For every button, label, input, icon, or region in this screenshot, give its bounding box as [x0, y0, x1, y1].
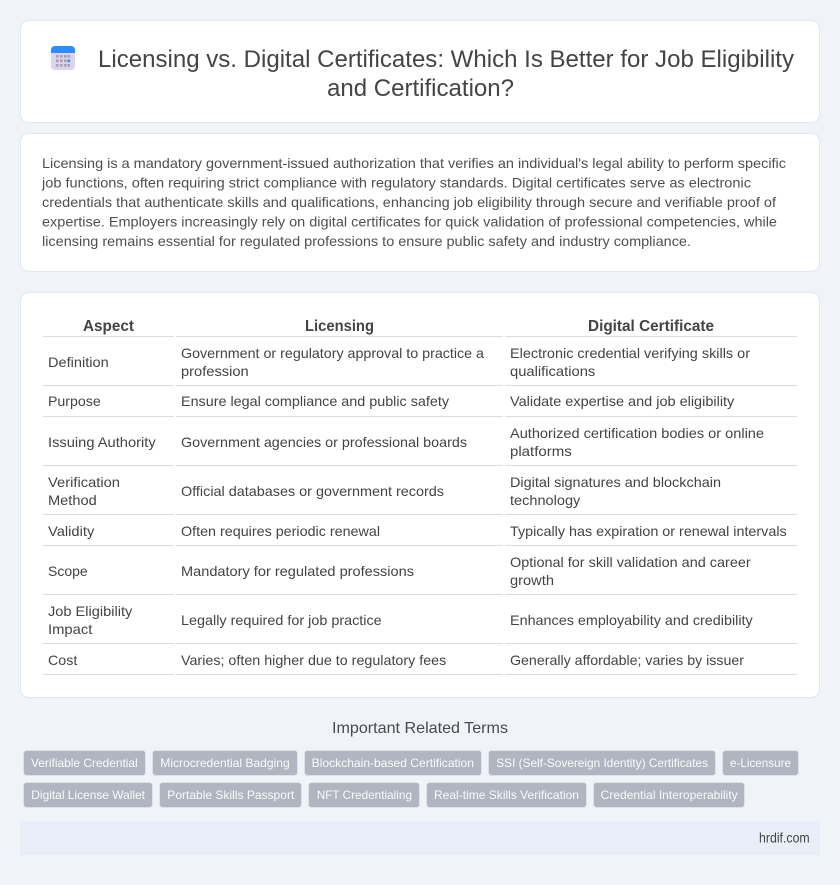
row: verification method: Official databases or government records — [181, 483, 444, 499]
heading: related terms: Important Related Terms — [332, 720, 508, 737]
row: definition — [43, 345, 797, 386]
panel: related term tags: Blockchain-based Certification — [312, 756, 474, 770]
row: validity: Typically has expiration or renewal intervals — [510, 523, 787, 539]
row: verification method: Digital signatures and blockchain — [510, 474, 721, 490]
row: job eligibility impact: Impact — [48, 621, 92, 637]
footer: hrdif.com — [759, 830, 810, 846]
panel: intro text: credentials that authenticate skills and qualifications, enhancing job eligibility through secure and verifiable proof of — [42, 194, 776, 210]
table header: Digital Certificate — [588, 318, 714, 335]
row: scope — [43, 554, 797, 595]
panel: intro text — [20, 134, 820, 272]
row: job eligibility impact: Job Eligibility — [48, 603, 132, 619]
title — [98, 46, 794, 102]
row: issuing authority: Government agencies or professional boards — [181, 434, 467, 450]
row: job eligibility impact: Legally required for job practice — [181, 612, 382, 628]
panel: intro text: licensing remains essential for regulated professions to ensure public safety and industry compliance. — [42, 233, 691, 249]
row: definition: Electronic credential verifying skills or — [510, 345, 750, 361]
panel: comparison table — [20, 292, 820, 698]
title: and Certification? — [327, 75, 514, 102]
row: definition: qualifications — [510, 363, 595, 379]
panel: related term tags: Credential Interoperability — [601, 788, 738, 802]
row: scope: Mandatory for regulated professions — [181, 563, 414, 579]
row: definition: profession — [181, 363, 249, 379]
panel: related term tags: Verifiable Credential — [31, 756, 138, 770]
panel: related term tags: NFT Credentialing — [317, 788, 412, 802]
row: job eligibility impact — [43, 603, 797, 644]
panel: related term tags: SSI (Self-Sovereign Identity) Certificates — [496, 756, 708, 770]
row: cost — [43, 652, 797, 675]
table header: Licensing — [305, 318, 374, 335]
row: purpose: Ensure legal compliance and public safety — [181, 393, 449, 409]
row: issuing authority — [43, 425, 797, 466]
row: verification method: technology — [510, 492, 580, 508]
row: scope: Scope — [48, 563, 88, 579]
row: issuing authority: Authorized certification bodies or online — [510, 425, 764, 441]
panel: related term tags — [24, 750, 798, 808]
title: Licensing vs. Digital Certificates: Which Is Better for Job Eligibility — [98, 46, 794, 73]
panel: related term tags: Real-time Skills Verification — [434, 788, 579, 802]
row: issuing authority: Issuing Authority — [48, 434, 156, 450]
panel: intro text: Licensing is a mandatory government-issued authorization that verifies an individual's legal ability to perform specific — [42, 155, 786, 171]
panel: related term tags: Digital License Wallet — [31, 788, 146, 802]
table header: Aspect — [83, 318, 135, 335]
row: cost: Generally affordable; varies by issuer — [510, 652, 744, 668]
row: verification method: Method — [48, 492, 97, 508]
footer — [20, 821, 820, 855]
row: validity — [43, 523, 797, 546]
panel: intro text: expertise. Employers increasingly rely on digital certificates for quick validation of professional competencies, while — [42, 214, 777, 230]
row: verification method — [43, 474, 797, 515]
row: cost: Cost — [48, 652, 77, 668]
panel: header — [20, 20, 820, 122]
panel: related term tags: Portable Skills Passport — [167, 788, 295, 802]
table header — [43, 318, 797, 337]
row: definition: Government or regulatory approval to practice a — [181, 345, 484, 361]
panel: related term tags: Microcredential Badging — [160, 756, 290, 770]
row: purpose: Validate expertise and job eligibility — [510, 393, 734, 409]
panel: intro text: job functions, often requiring strict compliance with regulatory standards. Digital certificates serve as electronic — [41, 174, 751, 190]
panel: related term tags: e-Licensure — [730, 756, 791, 770]
row: scope: growth — [510, 572, 554, 588]
row: scope: Optional for skill validation and career — [510, 554, 751, 570]
row: validity: Often requires periodic renewal — [181, 523, 380, 539]
icon: calendar grid — [51, 46, 75, 70]
row: definition: Definition — [48, 354, 109, 370]
row: purpose: Purpose — [48, 393, 101, 409]
row: issuing authority: platforms — [510, 443, 572, 459]
row: purpose — [43, 393, 797, 417]
row: validity: Validity — [48, 523, 94, 539]
row: verification method: Verification — [48, 474, 120, 490]
row: cost: Varies; often higher due to regulatory fees — [181, 652, 446, 668]
row: job eligibility impact: Enhances employability and credibility — [510, 612, 753, 628]
